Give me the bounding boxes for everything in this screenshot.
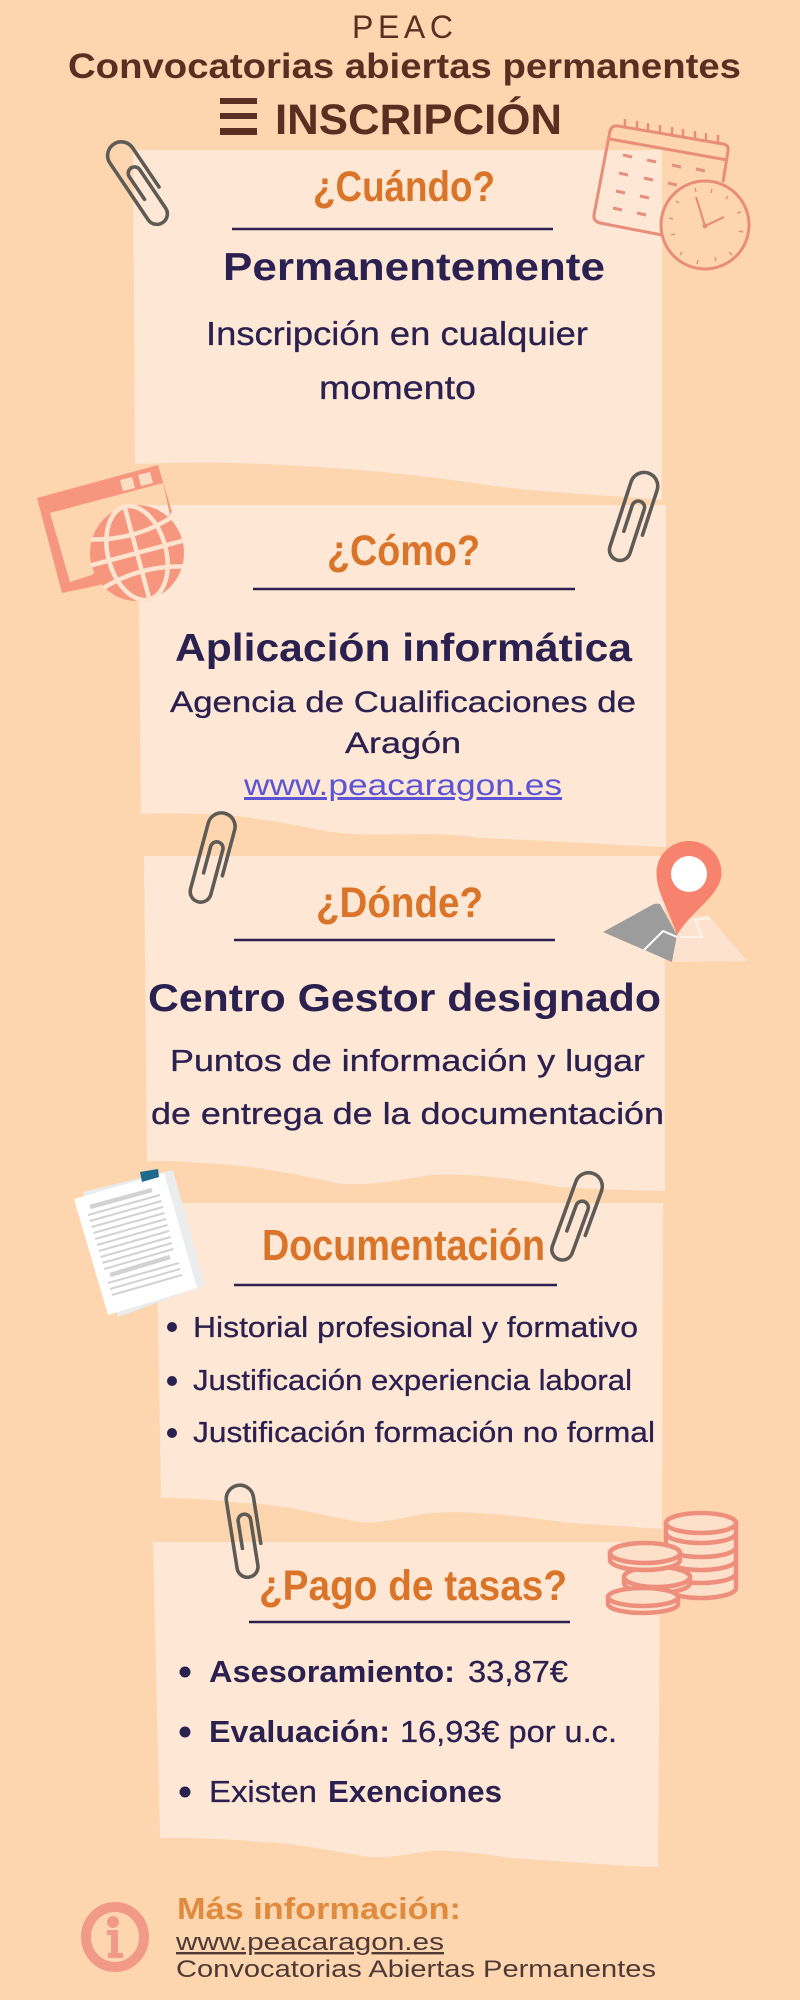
icon: paperclip — [549, 1169, 606, 1265]
text: inscripción en cualquier momento: Inscripción en cualquier — [206, 315, 588, 352]
icon: browser window with globe — [37, 465, 196, 612]
list: documentos: Justificación experiencia laboral — [193, 1365, 632, 1397]
panel background — [138, 505, 666, 847]
panel: dónde — [144, 810, 747, 1191]
list: documentos: Historial profesional y formativo — [193, 1312, 638, 1344]
list: tasas: Existen — [209, 1774, 317, 1809]
link: www.peacaragon.es: www.peacaragon.es — [243, 769, 562, 802]
text: agencia de cualificaciones — [170, 686, 636, 760]
list: tasas: Exenciones — [328, 1774, 502, 1809]
list: tasas: Asesoramiento: — [209, 1654, 455, 1689]
icon: paperclip — [188, 810, 238, 906]
panel: cuándo — [102, 119, 749, 500]
icon: calendar and clock — [594, 119, 749, 269]
title: Convocatorias abiertas permanentes: Convocatorias abiertas permanentes — [68, 47, 741, 86]
text: inscripción en cualquier momento: momento — [319, 369, 476, 406]
text: puntos de información: Puntos de información y lugar — [170, 1043, 645, 1078]
panel: cómo — [37, 465, 666, 847]
list: tasas: 16,93€ por u.c. — [400, 1714, 617, 1749]
title: INSCRIPCIÓN: INSCRIPCIÓN — [275, 95, 562, 144]
icon: menu bars — [220, 98, 257, 135]
heading: ¿Cuándo?: ¿Cuándo? — [313, 163, 495, 211]
list: tasas: 33,87€ — [468, 1654, 568, 1689]
panel background — [144, 856, 665, 1191]
footer: más información — [86, 1891, 656, 1983]
heading: Más información: Más información: — [177, 1891, 461, 1926]
icon: documents — [74, 1169, 205, 1317]
panel background — [156, 1203, 663, 1529]
subheading: Centro Gestor designado: Centro Gestor designado — [148, 977, 661, 1020]
text: agencia de cualificaciones: Agencia de Cualificaciones de — [170, 686, 636, 719]
list: documentos — [167, 1312, 655, 1449]
icon: paperclip — [607, 469, 661, 565]
text: inscripción en cualquier momento — [206, 315, 588, 406]
heading: ¿Dónde?: ¿Dónde? — [316, 879, 483, 927]
icon: paperclip — [102, 137, 177, 228]
icon: paperclip — [224, 1483, 266, 1579]
text: puntos de información: de entrega de la documentación — [151, 1096, 664, 1131]
heading: ¿Cómo?: ¿Cómo? — [327, 527, 480, 575]
title: PEAC: PEAC — [352, 9, 453, 45]
list: documentos: Justificación formación no formal — [193, 1417, 655, 1449]
subheading: Permanentemente: Permanentemente — [223, 246, 605, 289]
panel background — [133, 150, 662, 500]
panel background — [153, 1542, 660, 1867]
link: www.peacaragon.es: www.peacaragon.es — [175, 1929, 444, 1956]
heading: Documentación: Documentación — [262, 1221, 545, 1270]
list: tasas: Evaluación: — [209, 1714, 390, 1749]
panel: documentación — [74, 1169, 663, 1529]
text: puntos de información — [151, 1043, 664, 1131]
panel: pago de tasas — [153, 1483, 736, 1867]
text: Convocatorias Abiertas Permanentes: Convocatorias Abiertas Permanentes — [176, 1956, 656, 1983]
icon: map pin — [603, 841, 747, 962]
icon: coins — [608, 1513, 736, 1613]
text: agencia de cualificaciones: Aragón — [345, 727, 461, 760]
title block — [68, 9, 741, 144]
icon: info — [86, 1907, 144, 1967]
list: tasas — [180, 1654, 617, 1809]
heading: ¿Pago de tasas?: ¿Pago de tasas? — [259, 1562, 567, 1610]
subheading: Aplicación informática: Aplicación informática — [175, 627, 632, 670]
